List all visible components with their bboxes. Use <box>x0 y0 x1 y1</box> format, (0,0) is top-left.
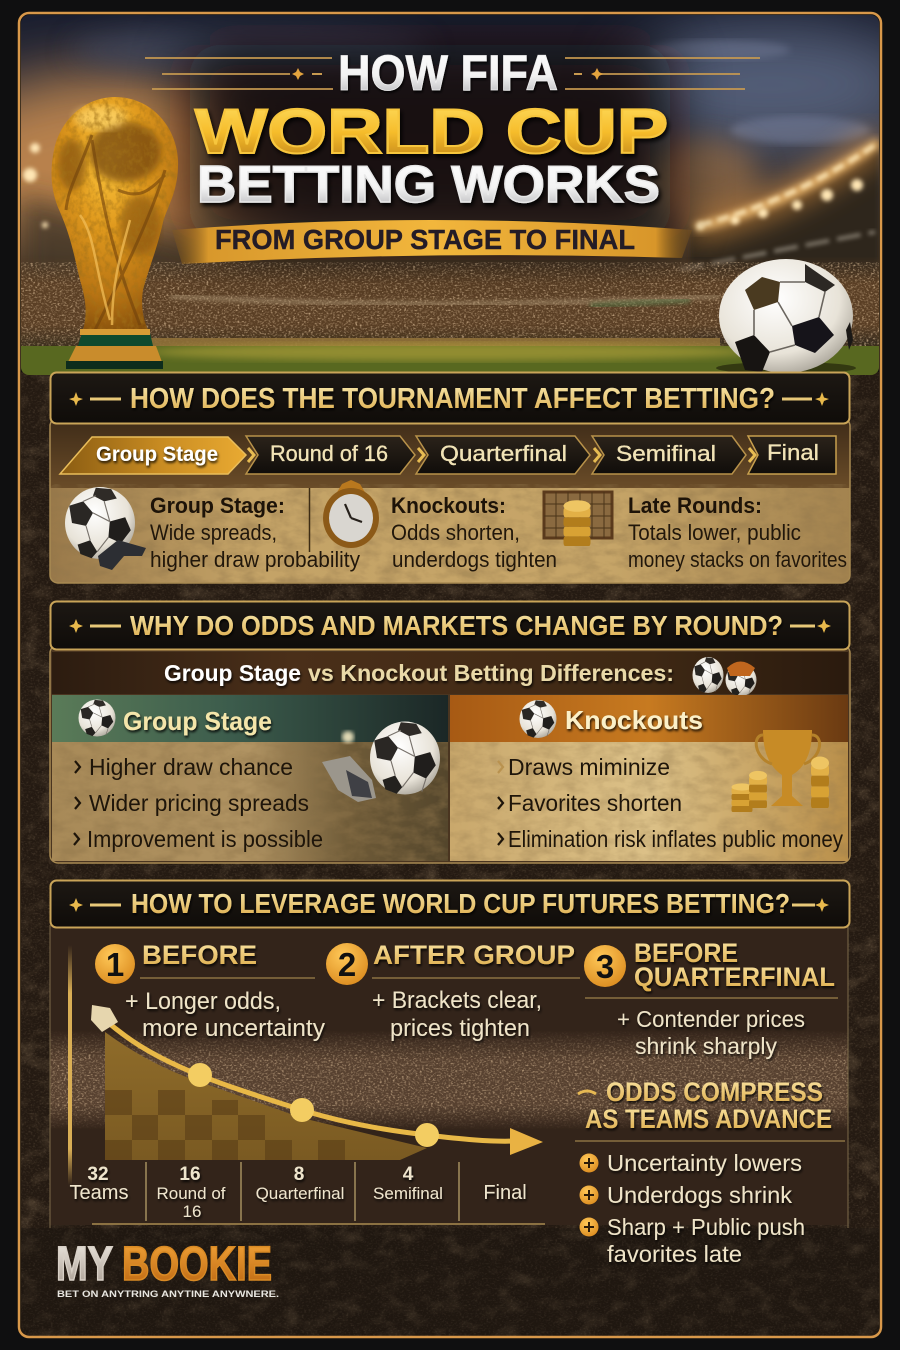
panel background <box>50 418 850 583</box>
marker: quarterfinal <box>290 1098 314 1122</box>
logo: mybookie: MY <box>56 1238 113 1291</box>
ad boards <box>150 338 720 346</box>
panel: tournament <box>50 372 850 583</box>
axis labels: 32 <box>87 1164 109 1185</box>
step 1: more uncertainty <box>142 1015 325 1042</box>
text: knockouts: Knockouts: <box>391 493 506 518</box>
text: late rounds <box>628 493 847 572</box>
logo: mybookie: BOOKIE <box>122 1238 272 1291</box>
step 3: QUARTERFINAL <box>634 962 835 992</box>
text: late rounds: Late Rounds: <box>628 493 762 518</box>
axis labels: 4 <box>403 1164 414 1185</box>
tab: quarterfinal <box>416 436 590 474</box>
axis labels: Teams <box>70 1182 128 1204</box>
axis labels: Round of <box>156 1184 226 1203</box>
title <box>145 45 760 214</box>
comparison band <box>52 652 848 696</box>
icon: world cup trophy <box>50 95 180 369</box>
tab: quarterfinal: Quarterfinal <box>440 441 567 466</box>
step 1: + Longer odds, <box>125 988 281 1015</box>
list <box>498 754 843 852</box>
bullet list <box>580 1150 805 1267</box>
comparison band: vs Knockout Betting Differences: <box>308 660 674 686</box>
logo: mybookie <box>56 1238 279 1300</box>
warm glow left <box>0 75 280 255</box>
step 3: + Contender prices <box>617 1006 805 1032</box>
text: group stage: Wide spreads, <box>150 520 277 545</box>
step 3 <box>584 938 838 1059</box>
step 2: prices tighten <box>390 1015 530 1042</box>
subtitle ribbon: FROM GROUP STAGE TO FINAL <box>215 224 635 255</box>
list: Elimination risk inflates public money <box>508 826 843 852</box>
left stand <box>21 183 200 274</box>
axis labels: Semifinal <box>373 1184 443 1203</box>
tab: group stage <box>60 437 246 474</box>
panel background <box>50 925 848 1228</box>
dark plate behind title <box>190 45 670 240</box>
panel background <box>50 645 850 863</box>
step 2: + Brackets clear, <box>372 987 542 1014</box>
column heading: Group Stage <box>123 706 272 736</box>
marker: semifinal <box>415 1123 439 1147</box>
step 3: BEFORE <box>634 938 738 968</box>
title line 3: BETTING WORKS <box>197 156 660 214</box>
icon: small ball <box>520 700 556 738</box>
marker: start <box>91 1005 118 1032</box>
list: Draws miminize <box>508 754 670 780</box>
tab: round of 16 <box>246 436 415 474</box>
heading bar <box>50 372 850 424</box>
stand ad strip <box>680 232 875 270</box>
column: knockouts <box>450 695 848 861</box>
curve <box>103 1018 515 1141</box>
step 2 <box>326 940 580 1042</box>
step 3: shrink sharply <box>635 1033 777 1059</box>
icon: soccer ball hero <box>716 259 856 374</box>
text: group stage: higher draw probability <box>150 547 360 572</box>
tab: semifinal: Semifinal <box>616 441 716 466</box>
heading bar <box>50 880 850 928</box>
list: Wider pricing spreads <box>89 790 309 816</box>
axis labels: 8 <box>294 1164 304 1185</box>
title line 1: HOW FIFA <box>338 45 558 101</box>
callout: odds compress: AS TEAMS ADVANCE <box>585 1104 832 1134</box>
heading bar: HOW DOES THE TOURNAMENT AFFECT BETTING? <box>130 383 775 415</box>
step 1: BEFORE <box>142 940 257 970</box>
axis labels: Quarterfinal <box>256 1184 344 1203</box>
clouds right <box>620 25 900 145</box>
step 1: 1 <box>106 946 124 983</box>
chart: odds compression <box>68 945 545 1224</box>
list: Improvement is possible <box>87 826 323 852</box>
list <box>74 754 323 852</box>
axis labels: 16 <box>179 1164 201 1185</box>
marker: round of 16 <box>188 1063 212 1087</box>
tab: round of 16: Round of 16 <box>270 441 388 466</box>
tab: semifinal <box>592 436 746 474</box>
comparison band: Group Stage <box>164 660 301 686</box>
step 3: 3 <box>596 948 614 985</box>
bullet list: Uncertainty lowers <box>607 1150 802 1176</box>
bullet list: favorites late <box>607 1241 742 1267</box>
panel: odds by round <box>50 602 850 863</box>
axis labels: 16 <box>183 1202 201 1221</box>
bullet list: Sharp + Public push <box>607 1214 805 1240</box>
tab: final: Final <box>767 440 819 465</box>
icon: goal net and coins <box>544 492 612 546</box>
pitch <box>21 346 879 376</box>
stand lights <box>690 140 879 230</box>
list: Higher draw chance <box>89 754 293 780</box>
icon: alarm clock <box>323 480 379 548</box>
icon: trophy and coins <box>732 730 829 812</box>
callout: odds compress: ODDS COMPRESS <box>606 1077 823 1107</box>
text: knockouts: underdogs tighten <box>392 547 557 572</box>
heading bar <box>50 602 850 650</box>
text: late rounds: money stacks on favorites <box>628 547 847 572</box>
logo: mybookie: BET ON ANYTRING ANYTINE ANYWNERE. <box>57 1289 279 1300</box>
text: group stage: Group Stage: <box>150 493 285 518</box>
chart area <box>105 1032 427 1160</box>
hero stadium scene <box>0 15 900 376</box>
text: knockouts <box>391 493 557 572</box>
panel: futures <box>50 880 850 1267</box>
tab: final <box>748 436 836 474</box>
icon: small ball <box>78 700 116 736</box>
heading bar: HOW TO LEVERAGE WORLD CUP FUTURES BETTING? <box>131 888 790 919</box>
icon: whistle and ball <box>322 722 440 802</box>
callout: odds compress <box>575 1077 845 1141</box>
axis labels <box>70 1164 527 1221</box>
crowd <box>21 262 879 343</box>
bullet list: Underdogs shrink <box>607 1182 793 1208</box>
step 1 <box>95 940 325 1042</box>
list: Favorites shorten <box>508 790 682 816</box>
tab: group stage: Group Stage <box>96 443 218 466</box>
axis labels: Final <box>483 1182 527 1204</box>
column: group stage <box>52 695 448 861</box>
text: knockouts: Odds shorten, <box>391 520 520 545</box>
right stand <box>690 140 879 345</box>
subtitle ribbon <box>172 220 692 264</box>
column heading: Knockouts <box>565 705 703 735</box>
step 2: 2 <box>338 946 356 983</box>
text: late rounds: Totals lower, public <box>628 520 801 545</box>
title ornaments <box>145 58 760 89</box>
heading bar: WHY DO ODDS AND MARKETS CHANGE BY ROUND? <box>130 610 783 641</box>
step 2: AFTER GROUP <box>373 940 575 970</box>
icon: ball and whistle <box>65 487 146 570</box>
text: group stage <box>150 493 360 572</box>
title line 2: WORLD CUP <box>195 97 668 167</box>
arrow head <box>510 1128 543 1155</box>
